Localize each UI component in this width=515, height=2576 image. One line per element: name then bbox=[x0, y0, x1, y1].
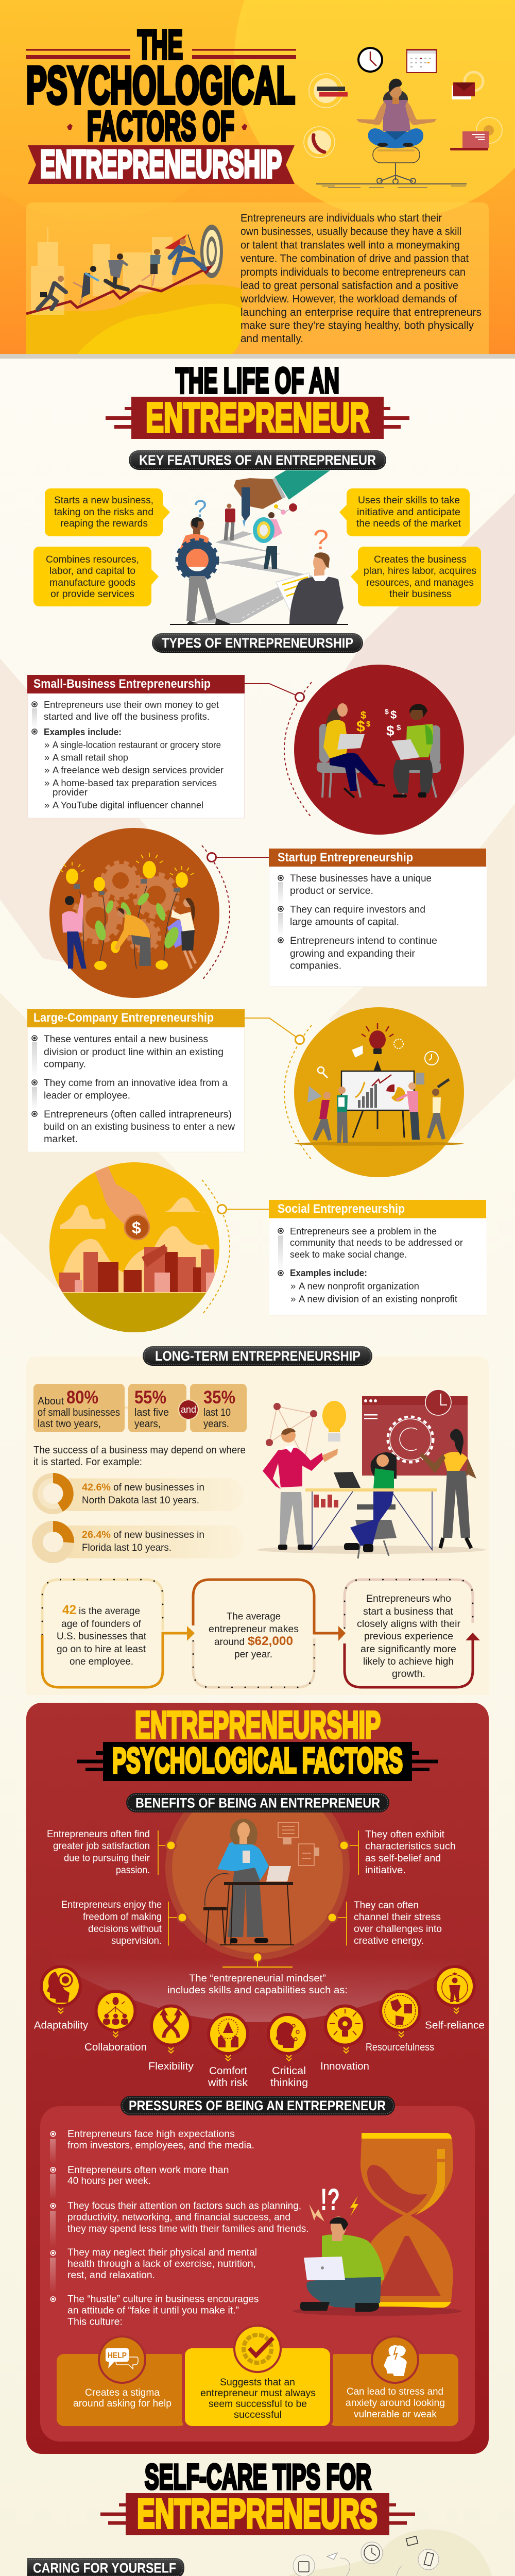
panel: small-business entrepreneurship: started and live off the business profits. bbox=[44, 711, 210, 722]
title: ENTREPRENEURSHIP bbox=[40, 142, 282, 185]
pressures list bbox=[50, 2129, 309, 2327]
benefit: freedom bbox=[61, 1900, 188, 1946]
stat flow: average earnings: $62,000 bbox=[248, 1634, 293, 1648]
man in magenta bbox=[263, 1428, 338, 1550]
intro text: launching an enterprise require that entrepreneurs bbox=[241, 307, 482, 318]
pressures list: Entrepreneurs often work more than bbox=[67, 2165, 229, 2176]
pressures list: health through a lack of exercise, nutrition, bbox=[67, 2259, 256, 2269]
stat boxes: 35% bbox=[203, 1387, 235, 1408]
panel: social entrepreneurship bbox=[202, 1180, 487, 1315]
icon: comfort with risk bbox=[207, 2013, 249, 2089]
hand holding pen bbox=[234, 470, 330, 527]
illustration: runners climbing arrow to target bbox=[26, 225, 242, 354]
stat flow: aligned experience: likely to achieve high bbox=[363, 1656, 454, 1667]
panel: small-business entrepreneurship: A freelance web design services provider bbox=[53, 765, 224, 775]
stat: florida donut: 26.4% bbox=[82, 1529, 111, 1540]
mindset arc glow bbox=[46, 1958, 469, 2022]
stat boxes: last 10 bbox=[203, 1407, 231, 1418]
person with megaphone bbox=[307, 1086, 332, 1141]
illustration: hand dropping coin over town bbox=[49, 1162, 219, 1333]
panel: small-business entrepreneurship: Small-Business Entrepreneurship bbox=[33, 677, 211, 691]
benefit: channel stress: over challenges into bbox=[354, 1924, 442, 1935]
intro text: Entrepreneurs are individuals who start their bbox=[241, 212, 442, 224]
benefit: job satisfaction: due to pursuing their bbox=[64, 1853, 150, 1864]
text: success depends on location: it is started. For example: bbox=[33, 1456, 142, 1468]
icon: help speech bubbles: HELP bbox=[108, 2351, 127, 2360]
benefit: job satisfaction: passion. bbox=[116, 1865, 150, 1876]
callout: uses their skills: Uses their skills to take bbox=[358, 495, 460, 506]
panel: large-company entrepreneurship: These ventures entail a new business bbox=[44, 1033, 208, 1045]
callout: creates the business plan bbox=[351, 547, 481, 606]
panel: large-company entrepreneurship: market. bbox=[44, 1133, 78, 1145]
benefit: freedom: supervision. bbox=[111, 1936, 162, 1946]
runner 5 with flag bbox=[164, 234, 205, 273]
pressures list: Entrepreneurs face high expectations bbox=[67, 2129, 235, 2140]
panel: startup entrepreneurship: product or service. bbox=[290, 885, 373, 896]
card: suggests always successful: seem successful to be bbox=[209, 2399, 307, 2410]
panel: social entrepreneurship: Examples include: bbox=[290, 1267, 367, 1278]
dollar signs: $ bbox=[360, 710, 366, 721]
stat flow: average founder age: age of founders of bbox=[61, 1618, 142, 1630]
benefit: self-belief: initiative. bbox=[365, 1865, 406, 1876]
benefit: freedom: freedom of making bbox=[83, 1911, 162, 1923]
stat flow: aligned experience: previous experience bbox=[364, 1631, 453, 1642]
woman in yellow bbox=[317, 703, 385, 798]
callout: combines resources: manufacture goods bbox=[49, 577, 135, 588]
title bbox=[26, 22, 296, 185]
stat flow: aligned experience: closely aligns with their bbox=[357, 1618, 461, 1630]
pressures list: from investors, employees, and the media. bbox=[67, 2140, 254, 2151]
woman with chart bbox=[253, 512, 282, 569]
pressures list: They focus their attention on factors such as planning, bbox=[67, 2200, 301, 2211]
benefit: self-belief: as self-belief and bbox=[365, 1853, 441, 1864]
pressures list: This culture: bbox=[67, 2316, 123, 2327]
pressures list: they may spend less time with their families and friends. bbox=[67, 2224, 309, 2234]
callout: combines resources bbox=[33, 547, 159, 606]
chair bbox=[316, 147, 467, 188]
panel: social entrepreneurship: Social Entrepreneurship bbox=[278, 1202, 405, 1216]
icon: critical thinking: thinking bbox=[270, 2077, 308, 2089]
card: suggests always successful: Suggests that an bbox=[220, 2377, 295, 2388]
stat: north dakota donut: North Dakota last 10 years. bbox=[82, 1495, 199, 1506]
bulbs bbox=[66, 861, 188, 970]
stat boxes: About bbox=[38, 1396, 64, 1407]
icon: coin: $ bbox=[132, 1218, 141, 1237]
intro text: lead to great personal satisfaction and a positive bbox=[241, 280, 458, 292]
stat flow: average founder age: U.S. businesses that bbox=[57, 1631, 147, 1642]
panel: startup entrepreneurship: They can require investors and bbox=[290, 904, 425, 915]
illustration: two seated women with laptops: $ bbox=[385, 707, 389, 716]
seated woman and desk bbox=[305, 1452, 437, 1558]
connector bbox=[202, 1180, 269, 1315]
callout: creates the business plan: their business bbox=[389, 588, 452, 600]
stat: north dakota donut: of new businesses in bbox=[113, 1482, 204, 1493]
callout: uses their skills bbox=[339, 488, 470, 536]
icon: question marks: ? bbox=[194, 495, 207, 522]
panel: large-company entrepreneurship: They come from an innovative idea from a bbox=[44, 1077, 228, 1089]
floating icons bbox=[293, 2542, 439, 2576]
text: success depends on location: The success of a business may depend on where bbox=[33, 1444, 246, 1456]
woman with paper bbox=[337, 1087, 348, 1143]
icon: adaptability: Adaptability bbox=[34, 2020, 88, 2031]
benefit: channel stress: creative energy. bbox=[354, 1936, 424, 1946]
icon: critical thinking bbox=[267, 2013, 309, 2089]
runner 4 bbox=[142, 249, 161, 286]
heading: the life of an entrepreneur: ENTREPRENEUR bbox=[146, 395, 369, 440]
stat flow: average earnings: per year. bbox=[234, 1649, 272, 1660]
runner 3 bbox=[106, 253, 128, 290]
benefit: job satisfaction: Entrepreneurs often find bbox=[47, 1829, 150, 1840]
illustration: two people meditating bbox=[263, 2529, 493, 2576]
mindset intro bbox=[167, 1952, 348, 1996]
panel: introduction bbox=[26, 202, 489, 354]
card: suggests always successful: successful bbox=[234, 2410, 282, 2420]
panel: startup entrepreneurship: companies. bbox=[290, 960, 341, 972]
connector bbox=[202, 845, 269, 980]
woman in green bbox=[391, 704, 441, 798]
heading: the life of an entrepreneur bbox=[106, 361, 409, 440]
panel: small-business entrepreneurship: A single-location restaurant or grocery store bbox=[53, 739, 221, 750]
panel: entrepreneurship psychological factors bbox=[0, 1703, 493, 2576]
man in suit with document bbox=[276, 552, 344, 624]
stat flow: average founder age bbox=[42, 1580, 195, 1687]
card: creates a stigma bbox=[57, 2336, 186, 2426]
card: can lead to stress: anxiety around looking bbox=[346, 2398, 445, 2409]
leaves bbox=[93, 891, 181, 951]
pill heading: PRESSURES OF BEING AN ENTREPRENEUR bbox=[129, 2098, 386, 2113]
pressures list: 40 hours per week. bbox=[67, 2176, 151, 2187]
panel: pressures bbox=[40, 2096, 475, 2442]
stat flow: average earnings bbox=[193, 1580, 346, 1687]
stems bbox=[80, 886, 178, 969]
clouds bbox=[60, 1197, 216, 1293]
icon: self-reliance: Self-reliance bbox=[425, 2020, 485, 2031]
floating icons bbox=[318, 1039, 438, 1078]
person in pink bbox=[62, 894, 87, 969]
panel: social entrepreneurship: community that needs to be addressed or bbox=[290, 1237, 463, 1248]
panel: social entrepreneurship: Entrepreneurs see a problem in the bbox=[290, 1226, 437, 1236]
panel: small-business entrepreneurship: » bbox=[44, 777, 49, 788]
intro text: own businesses, usually because they have a skill bbox=[241, 226, 461, 238]
panel: large-company entrepreneurship: leader or employee. bbox=[44, 1090, 130, 1101]
panel: small-business entrepreneurship: » bbox=[44, 800, 49, 810]
man in pink bbox=[397, 1082, 420, 1140]
network dots bbox=[266, 1403, 317, 1458]
dollar signs bbox=[356, 710, 371, 735]
icon: question marks: ? bbox=[313, 524, 329, 555]
benefit: channel stress: channel their stress bbox=[354, 1912, 441, 1923]
header background bbox=[0, 0, 515, 359]
woman in cream bbox=[171, 898, 196, 969]
runner 2 bbox=[73, 266, 99, 304]
pill heading: types of entrepreneurship: TYPES OF ENTREPRENEURSHIP bbox=[162, 635, 353, 651]
callout: starts a new business: taking on the risks and bbox=[54, 506, 153, 518]
benefit: self-belief bbox=[338, 1829, 456, 1876]
icon: critical thinking: Critical bbox=[272, 2065, 306, 2077]
stat flow: average earnings: around bbox=[214, 1636, 245, 1648]
intro text: make sure they’re staying healthy, both physically bbox=[241, 320, 474, 332]
panel: long-term entrepreneurship bbox=[26, 1346, 489, 1695]
title: PSYCHOLOGICAL bbox=[26, 56, 295, 114]
dollar signs: $ bbox=[356, 718, 365, 735]
illustration: meditating woman on office chair bbox=[304, 47, 502, 188]
icon: phone bbox=[304, 127, 335, 158]
stat boxes: 80% bbox=[66, 1387, 98, 1408]
stat flow: average founder age: one employee. bbox=[70, 1656, 133, 1667]
panel: small-business entrepreneurship: Entrepreneurs use their own money to get bbox=[44, 699, 219, 710]
intro text: prompts individuals to become entrepreneurs can bbox=[241, 266, 466, 278]
stat flow: aligned experience: start a business that bbox=[363, 1606, 454, 1617]
dollar signs: $ bbox=[366, 720, 371, 728]
panel: social entrepreneurship: » bbox=[290, 1293, 296, 1304]
card: can lead to stress: vulnerable or weak bbox=[354, 2409, 437, 2420]
icon: clock bbox=[357, 47, 383, 73]
stat boxes: last two years, bbox=[38, 1418, 101, 1430]
illustration: startup team growing light bulbs bbox=[49, 828, 219, 998]
panel: social entrepreneurship: A new division of an existing nonprofit bbox=[299, 1293, 457, 1304]
title: THE bbox=[138, 22, 183, 67]
runner 1 bbox=[38, 276, 66, 309]
illustration: team with board and bulb bbox=[257, 1389, 486, 1558]
stat flow: aligned experience: Entrepreneurs who bbox=[366, 1593, 451, 1604]
stat flow: aligned experience: are significantly more bbox=[360, 1643, 456, 1655]
illustration: key features road and people bbox=[170, 470, 348, 624]
icon: comfort with risk: Comfort bbox=[209, 2065, 247, 2077]
benefit: freedom: Entrepreneurs enjoy the bbox=[61, 1900, 162, 1910]
stat: florida donut bbox=[32, 1521, 243, 1563]
benefit: job satisfaction: greater job satisfaction bbox=[53, 1841, 150, 1852]
icon: resourcefulness: Resourcefulness bbox=[366, 2042, 434, 2053]
card: creates a stigma: Creates a stigma bbox=[85, 2387, 160, 2398]
pressures list: an attitude of “fake it until you make it.” bbox=[67, 2306, 239, 2316]
icon: interrobang and lightning bbox=[309, 2182, 358, 2222]
stat flow: aligned experience: growth. bbox=[392, 1668, 425, 1680]
panel: startup entrepreneurship: Startup Entrepreneurship bbox=[278, 851, 413, 865]
callout: combines resources: or provide services bbox=[50, 588, 134, 600]
illustration: two seated women with laptops: $ bbox=[390, 708, 397, 721]
callout: uses their skills: the needs of the market bbox=[356, 518, 461, 529]
pill heading: LONG-TERM ENTREPRENEURSHIP bbox=[155, 1348, 360, 1364]
benefit: channel stress: They can often bbox=[354, 1900, 419, 1911]
stat flow: aligned experience bbox=[345, 1580, 480, 1687]
icon: envelope bbox=[452, 72, 483, 99]
stat flow: average founder age: is the average bbox=[79, 1605, 140, 1617]
man with gear bbox=[177, 517, 231, 624]
stat boxes: and bbox=[181, 1404, 196, 1415]
title: FACTORS OF bbox=[87, 103, 234, 149]
stat boxes bbox=[33, 1384, 247, 1432]
icon: collaboration bbox=[84, 1990, 147, 2053]
illustration: two seated women with laptops: $ bbox=[386, 723, 394, 739]
card: suggests always successful bbox=[182, 2326, 333, 2428]
stat flow: average founder age: 42 bbox=[62, 1603, 76, 1617]
icon: interrobang and lightning: !? bbox=[320, 2182, 340, 2217]
callout: creates the business plan: Creates the business bbox=[374, 554, 467, 565]
panel: startup entrepreneurship: These businesses have a unique bbox=[290, 873, 432, 884]
stat boxes: of small businesses bbox=[38, 1407, 120, 1418]
pressures list: productivity, networking, and financial success, and bbox=[67, 2212, 290, 2223]
callout: starts a new business bbox=[45, 488, 170, 536]
small man bbox=[225, 504, 235, 540]
panel: small-business entrepreneurship: A home-based tax preparation services bbox=[53, 777, 217, 788]
pill heading: benefits: BENEFITS OF BEING AN ENTREPRENEUR bbox=[135, 1795, 380, 1810]
icon: bulb bbox=[322, 1401, 346, 1442]
woman bbox=[356, 79, 437, 148]
pill heading: caring for yourself: CARING FOR YOURSELF bbox=[33, 2561, 176, 2576]
icon: question marks bbox=[194, 495, 329, 555]
callout: combines resources: Combines resources, bbox=[46, 554, 139, 565]
icon: innovation bbox=[320, 2004, 369, 2072]
benefit: channel stress bbox=[327, 1900, 442, 1946]
mindset intro: The “entrepreneurial mindset” bbox=[189, 1973, 326, 1984]
stat: north dakota donut: 42.6% bbox=[82, 1482, 111, 1493]
panel: large-company entrepreneurship: company. bbox=[44, 1058, 86, 1070]
mindset intro: includes skills and capabilities such as: bbox=[167, 1985, 348, 1996]
illustration: stressed man and hourglass bbox=[293, 2133, 461, 2316]
heading bbox=[77, 1703, 438, 1781]
panel: small-business entrepreneurship: provider bbox=[53, 787, 88, 798]
intro text: venture. The combination of drive and passion that bbox=[241, 252, 469, 265]
stat flow: average earnings: The average bbox=[227, 1611, 281, 1622]
icon: books bbox=[309, 74, 348, 108]
callout: combines resources: labor, and capital to bbox=[49, 565, 135, 577]
panel: large-company entrepreneurship: Large-Company Entrepreneurship bbox=[33, 1011, 214, 1025]
icon: calendar bbox=[406, 49, 437, 73]
panel: large-company entrepreneurship: division or product line within an existing bbox=[44, 1046, 224, 1058]
icon: comfort with risk: with risk bbox=[208, 2077, 248, 2089]
pill heading bbox=[121, 2096, 395, 2115]
callout: starts a new business: reaping the rewards bbox=[60, 518, 148, 529]
icon: bulb with rays bbox=[362, 1023, 393, 1054]
callout: uses their skills: initiative and anticipate bbox=[357, 506, 460, 518]
panel: small-business entrepreneurship: Examples include: bbox=[44, 726, 122, 737]
panel: small-business entrepreneurship bbox=[27, 675, 312, 818]
icon: innovation: Innovation bbox=[320, 2061, 369, 2072]
person in orange bbox=[114, 908, 151, 966]
icon: coin bbox=[125, 1215, 149, 1240]
heading: self-care tips for entrepreneurs bbox=[100, 2457, 415, 2537]
illustration: presentation team with easel bbox=[294, 1007, 464, 1177]
stat: florida donut: Florida last 10 years. bbox=[82, 1542, 171, 1553]
benefit: freedom: decisions without bbox=[88, 1924, 162, 1935]
icon: help speech bubbles bbox=[106, 2348, 138, 2369]
connector bbox=[245, 682, 312, 818]
benefit: self-belief: characteristics such bbox=[365, 1841, 456, 1852]
panel: startup entrepreneurship bbox=[202, 845, 487, 987]
icon: flexibility bbox=[148, 2004, 194, 2072]
stat: north dakota donut bbox=[32, 1473, 243, 1514]
card: suggests always successful: entrepreneur must always bbox=[200, 2388, 316, 2399]
connector bbox=[245, 1018, 312, 1160]
callout: creates the business plan: plan, hires labor, acquires bbox=[364, 565, 476, 577]
panel: small-business entrepreneurship: A small retail shop bbox=[53, 752, 128, 762]
panel: social entrepreneurship: seek to make social change. bbox=[290, 1249, 407, 1260]
icon: flexibility: Flexibility bbox=[148, 2061, 194, 2072]
stat flow: average founder age: go on to hire at least bbox=[57, 1643, 146, 1655]
card: creates a stigma: around asking for help bbox=[73, 2398, 171, 2409]
stat: florida donut: of new businesses in bbox=[113, 1529, 204, 1540]
panel: social entrepreneurship: » bbox=[290, 1281, 296, 1291]
icon: laptop bbox=[450, 117, 502, 150]
pressures list: They may neglect their physical and mental bbox=[67, 2247, 257, 2258]
icon: check mark bbox=[244, 2335, 273, 2363]
panel: startup entrepreneurship: large amounts of capital. bbox=[290, 916, 399, 927]
text: success depends on location bbox=[33, 1444, 246, 1468]
panel: small-business entrepreneurship: » bbox=[44, 765, 49, 775]
standing woman bbox=[420, 1429, 476, 1548]
intro text: or talent that translates well into a moneymaking bbox=[241, 239, 460, 251]
stat boxes: years, bbox=[134, 1418, 161, 1430]
callout: creates the business plan: resources, and manages bbox=[366, 577, 474, 588]
heading: the life of an entrepreneur: THE LIFE OF AN bbox=[176, 361, 339, 401]
hand bbox=[95, 1166, 148, 1224]
panel: small-business entrepreneurship: » bbox=[44, 752, 49, 762]
intro text bbox=[240, 212, 482, 345]
panel: large-company entrepreneurship: Entrepreneurs (often called intrapreneurs) bbox=[44, 1109, 232, 1120]
illustration: two seated women with laptops bbox=[294, 665, 464, 835]
icon: resourcefulness bbox=[366, 1990, 434, 2053]
icon: stressed head bbox=[384, 2345, 407, 2376]
illustration: woman at standing desk bbox=[165, 1812, 350, 1960]
stat flow: average earnings: entrepreneur makes bbox=[209, 1623, 299, 1635]
pressures list: The “hustle” culture in business encourages bbox=[67, 2294, 259, 2305]
heading: self-care tips for entrepreneurs: SELF-CARE TIPS FOR bbox=[145, 2457, 371, 2497]
intro text: worldview. However, the workload demands of bbox=[240, 293, 457, 305]
stat boxes: 55% bbox=[134, 1387, 166, 1408]
icon: self-reliance bbox=[425, 1965, 485, 2031]
callout: starts a new business: Starts a new business, bbox=[54, 495, 153, 506]
man with laptop bbox=[300, 2216, 384, 2312]
heading: self-care tips for entrepreneurs: ENTREPRENEURS bbox=[137, 2490, 377, 2537]
panel: large-company entrepreneurship bbox=[27, 1009, 312, 1160]
panel: large-company entrepreneurship: build on an existing business to enter a new bbox=[44, 1121, 235, 1132]
intro text: and mentally. bbox=[241, 333, 303, 345]
pill heading: key features: KEY FEATURES OF AN ENTREPRENEUR bbox=[139, 452, 376, 468]
stat boxes: last five bbox=[134, 1407, 169, 1418]
panel: startup entrepreneurship: growing and expanding their bbox=[290, 948, 415, 959]
panel: startup entrepreneurship: Entrepreneurs intend to continue bbox=[290, 935, 437, 946]
icon: adaptability bbox=[34, 1965, 88, 2031]
panel: small-business entrepreneurship: » bbox=[44, 739, 49, 750]
illustration: two seated women with laptops: $ bbox=[397, 723, 401, 732]
woman with telescope bbox=[427, 1079, 449, 1140]
stat boxes: years. bbox=[203, 1418, 229, 1430]
pressures list: rest, and relaxation. bbox=[67, 2270, 155, 2281]
panel: social entrepreneurship: A new nonprofit organization bbox=[299, 1281, 419, 1291]
panel: small-business entrepreneurship: A YouTube digital influencer channel bbox=[53, 800, 203, 810]
card: can lead to stress: Can lead to stress and bbox=[347, 2386, 443, 2397]
buildings bbox=[59, 1247, 214, 1292]
benefit: self-belief: They often exhibit bbox=[365, 1829, 445, 1840]
icon: collaboration: Collaboration bbox=[84, 2042, 147, 2053]
card: can lead to stress bbox=[329, 2336, 458, 2426]
benefit: job satisfaction bbox=[47, 1829, 177, 1876]
